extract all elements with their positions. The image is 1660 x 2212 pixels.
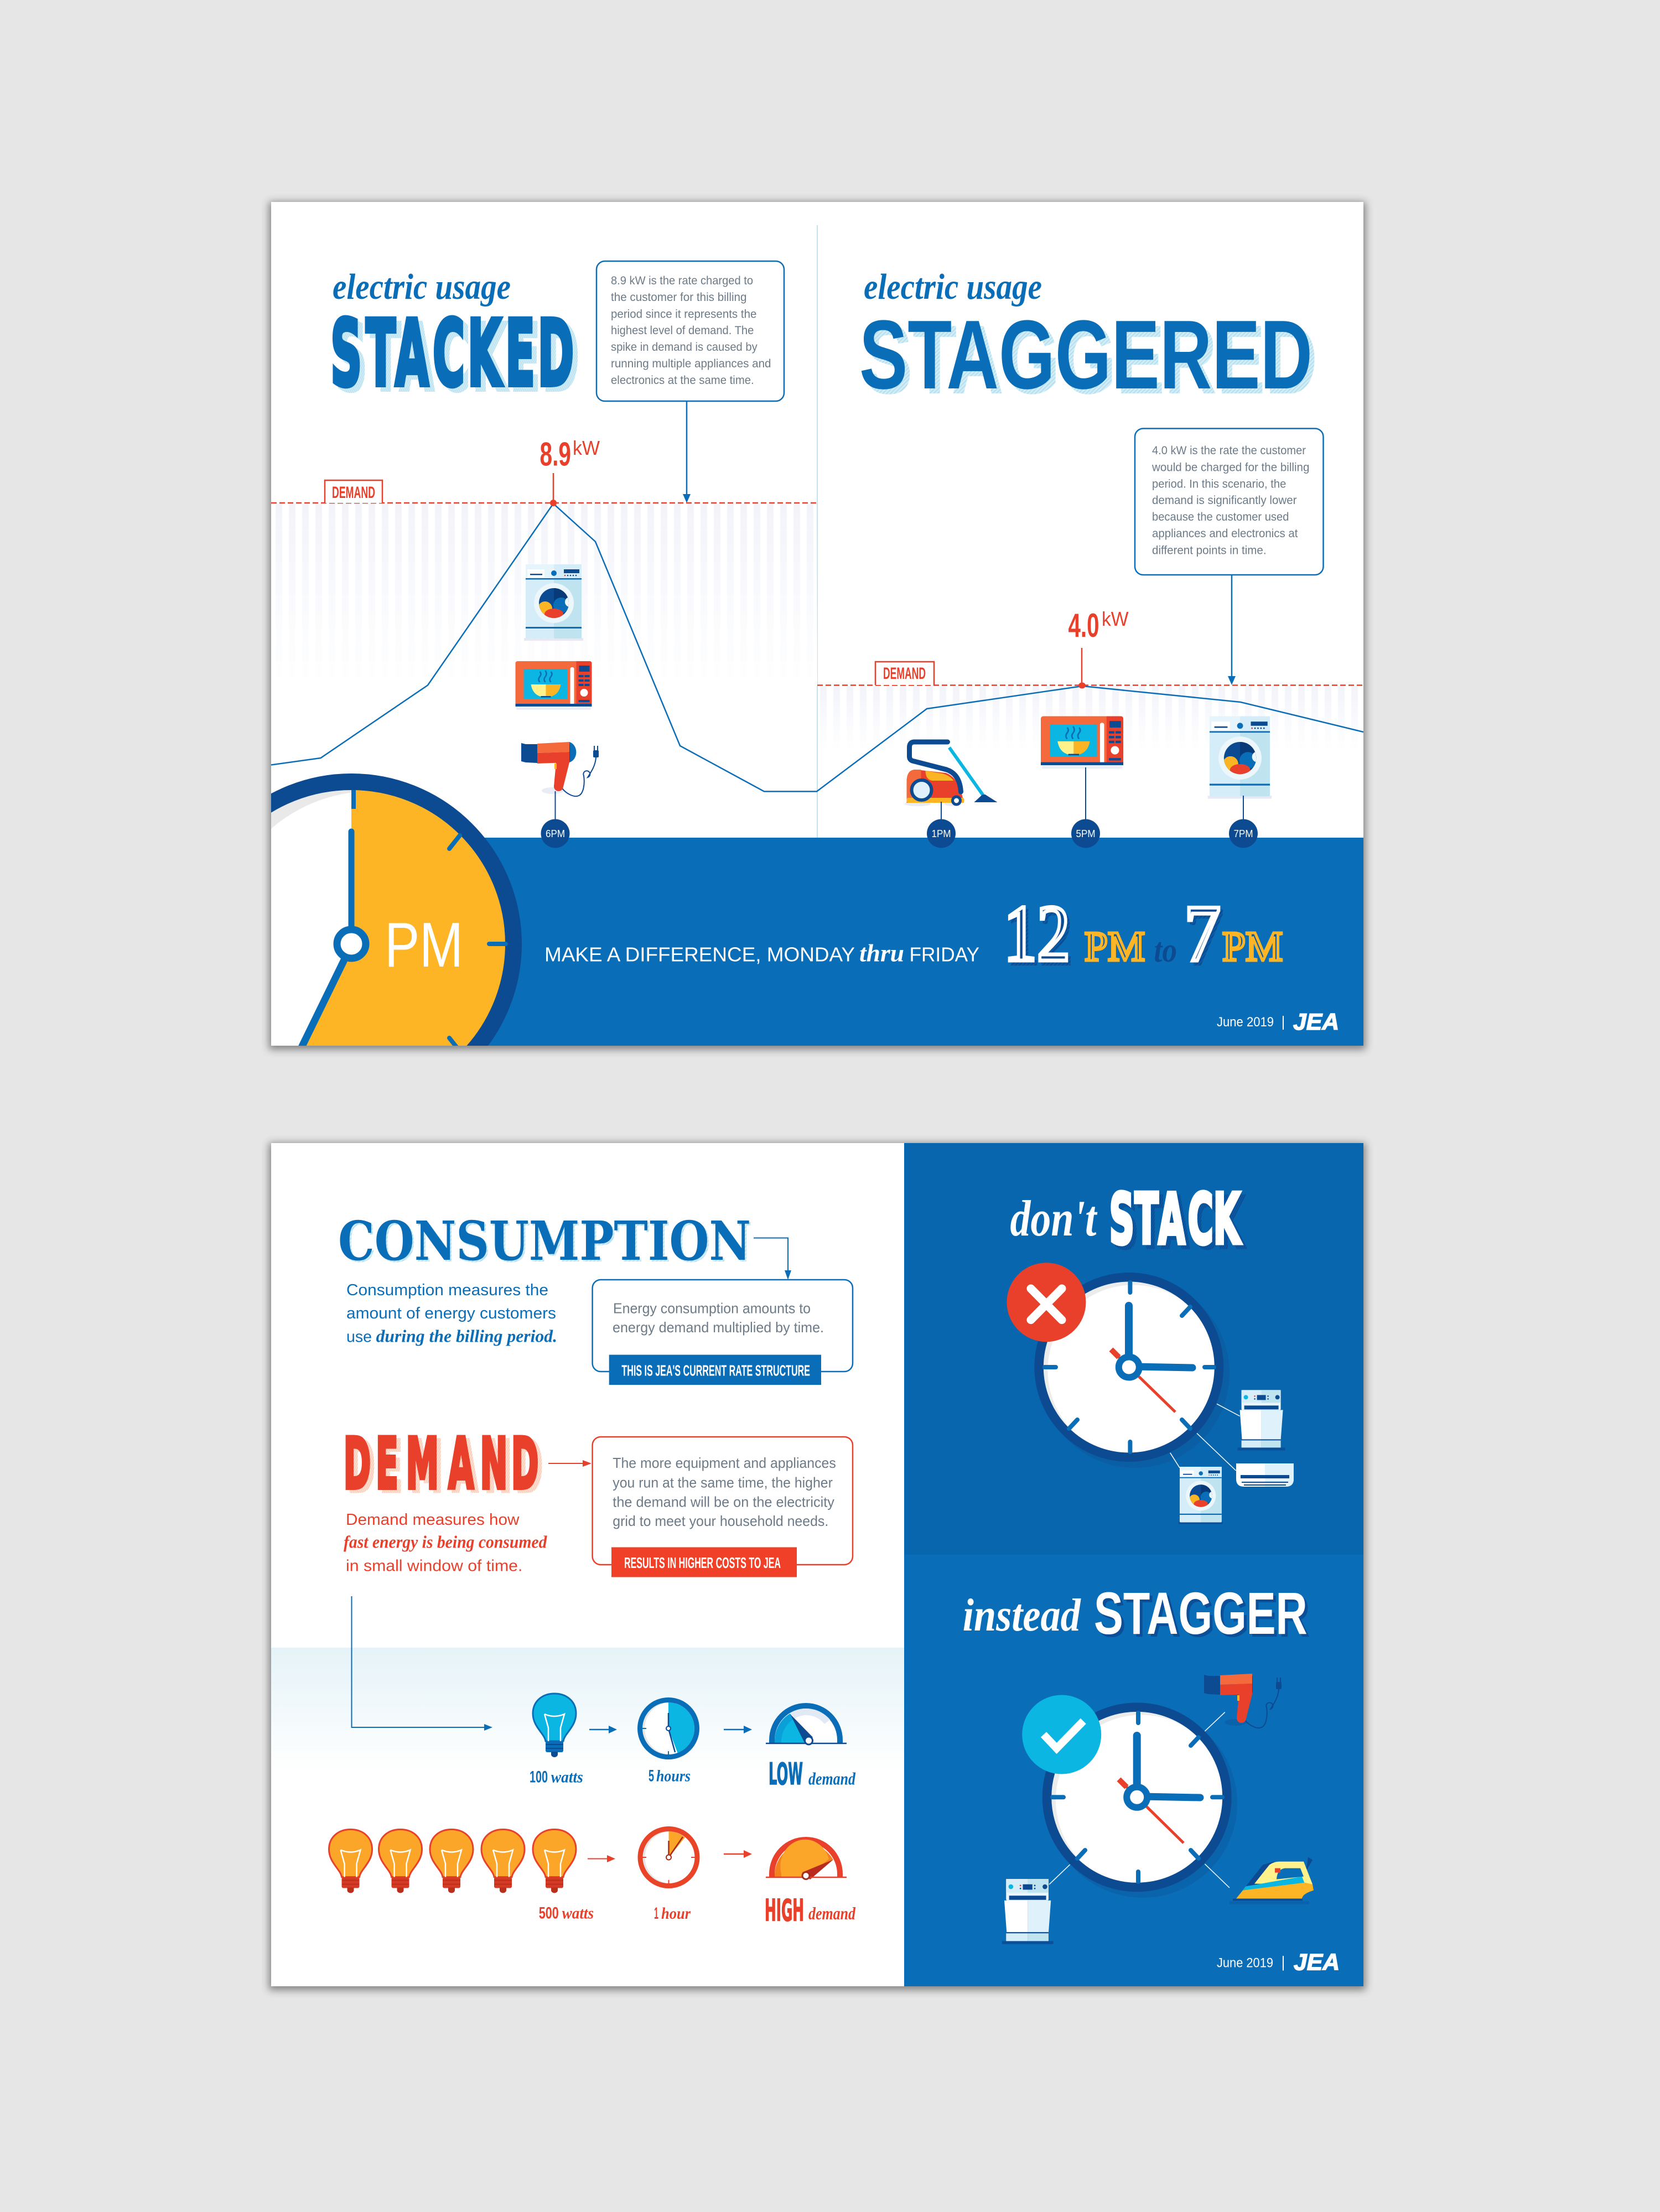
icon: row of five orange bulbs [329,1829,576,1893]
icon: 1 hour clock [640,1829,697,1886]
time window: 12 PM to 7 PM: 12 [1007,892,1073,982]
time window: 12 PM to 7 PM: to [1154,932,1177,969]
demand line stacked: DEMAND [332,484,375,502]
callout: demand: the demand will be on the electricity [613,1494,834,1510]
icon: clock with stacked appliances [1039,1277,1230,1468]
label: high demand: demand [808,1903,856,1923]
callout: 8.9 kW explanation: spike in demand is caused by [611,341,758,354]
arrow: bulb to clock low [589,1726,617,1733]
value: 8.9 kW: 8.9 [540,436,571,472]
label: 5 hours: 5 [649,1767,654,1785]
footer: June 2019 JEA [1217,1949,1340,1975]
clock label: PM [385,910,463,980]
callout: 8.9 kW explanation [596,261,784,401]
time window: 12 PM to 7 PM [1004,889,1283,982]
bottom band [271,838,1363,1046]
banner: higher costs [611,1547,797,1577]
banner: current rate structure [609,1355,821,1385]
icon: washer stacked [524,564,583,641]
heading: electric usage staggered: electric usage [864,267,1042,307]
time window: 12 PM to 7 PM: PM [1085,923,1145,970]
heading: don't stack: don't [1010,1190,1097,1247]
leader lines to appliances [1170,1404,1240,1471]
panel: don't stack [904,1143,1363,1555]
banner: current rate structure: THIS IS JEA'S CURRENT RATE STRUCTURE [621,1362,810,1379]
heading: consumption: CONSUMPTION [338,1209,751,1273]
label: 1 hour: hour [661,1904,691,1923]
footer: June 2019 JEA: JEA [1293,1009,1339,1035]
heading: electric usage staggered [859,267,1317,414]
value: 4.0 kW: 4.0 [1068,607,1099,644]
demand line staggered [817,648,1363,688]
footer: June 2019 JEA: June 2019 [1217,1015,1274,1030]
icon: high demand gauge [766,1837,847,1879]
value: 4.0 kW: kW [1102,607,1129,630]
icon: air conditioner [1236,1463,1294,1487]
callout: demand [593,1437,853,1577]
heading: instead stagger: STAGGER [1097,1582,1310,1649]
time window: 12 PM to 7 PM: 7 [1184,889,1221,978]
footer: June 2019 JEA: JEA [1294,1949,1340,1975]
tagline: make a difference: FRIDAY [910,943,979,966]
panel: instead stagger [904,1555,1363,1986]
tagline: make a difference: MAKE A DIFFERENCE, MONDAY [544,943,855,966]
line chart: stacked and staggered demand [271,505,1363,791]
text: demand definition: Demand measures how [346,1511,520,1529]
marker: 1PM [927,802,956,848]
heading: consumption: CONSUMPTION [340,1211,753,1274]
heading: electric usage stacked: STACKED [330,300,574,407]
callout: 4.0 kW explanation: appliances and electronics at [1152,527,1298,540]
callout: demand: grid to meet your household needs. [613,1513,828,1529]
callout: 4.0 kW explanation: would be charged for the billing [1151,461,1309,474]
label: low demand: demand [808,1769,856,1789]
icon: washer staggered [1208,716,1272,799]
heading: instead stagger [963,1580,1310,1649]
text: consumption definition: Consumption measures the [346,1281,548,1299]
icon: microwave stacked [516,661,592,710]
icon: blue bulb [533,1694,576,1757]
icon: clock with staggered appliances [1047,1707,1237,1898]
icon: low demand gauge [766,1703,847,1744]
heading: instead stagger: instead [963,1590,1082,1641]
label: low demand: LOW [769,1757,803,1792]
callout: 8.9 kW explanation: period since it represents the [611,308,756,321]
callout: 4.0 kW explanation: demand is significantly lower [1152,494,1297,507]
icon: dishwasher [1002,1879,1054,1944]
callout: demand: The more equipment and appliances [613,1455,836,1471]
callout: 8.9 kW explanation: the customer for this billing [611,291,747,304]
heading: electric usage stacked: electric usage [333,267,511,307]
callout: 4.0 kW explanation: 4.0 kW is the rate the customer [1152,444,1306,457]
arrow: bulbs to clock high [588,1855,615,1862]
label: high demand: HIGH [765,1893,804,1928]
arrow: demand text to example [352,1596,492,1731]
text: consumption definition [346,1281,557,1346]
callout: consumption: Energy consumption amounts to [613,1300,811,1316]
heading: demand: DEMAND [344,1424,538,1505]
callout: 4.0 kW explanation: different points in time. [1152,544,1267,557]
footer: June 2019 JEA [1217,1009,1339,1035]
panel: front page stacked vs staggered [263,197,1371,1055]
callout: 8.9 kW explanation: highest level of demand. The [611,324,754,337]
panel: back page consumption vs demand [269,1143,1366,1990]
arrow: callout to stacked demand line [683,401,691,503]
text: consumption definition: during the billing period. [376,1326,557,1346]
arrow: clock to gauge high [724,1850,752,1858]
heading: don't stack: STACK [1109,1180,1242,1260]
icon: iron [1230,1857,1314,1904]
arrow: clock to gauge low [724,1726,752,1733]
heading: electric usage stacked: STACKED [335,305,579,412]
heading: demand: DEMAND [347,1427,543,1508]
icon: 5 hour clock [640,1700,697,1757]
icon: dishwasher [1238,1390,1285,1450]
text: consumption definition: use [346,1328,372,1346]
callout: demand: you run at the same time, the higher [613,1474,833,1491]
icon: hair dryer [1204,1674,1282,1728]
icon: check badge [1022,1695,1101,1774]
time window: 12 PM to 7 PM: 7 [1187,892,1223,982]
marker: 7PM: 7PM [1234,828,1253,839]
icon: hair dryer stacked [521,742,599,796]
label: 500 watts [539,1904,594,1922]
arrow: callout to staggered demand line [1228,575,1236,685]
callout: 8.9 kW explanation: electronics at the same time. [611,374,754,387]
text: demand definition: fast energy is being consumed [344,1532,547,1552]
callout: consumption [593,1280,853,1385]
callout: 4.0 kW explanation: because the customer used [1152,511,1289,523]
value: 8.9 kW: kW [573,437,600,459]
callout: 4.0 kW explanation [1135,428,1324,575]
label: 1 hour: 1 [654,1904,658,1923]
marker: 7PM [1229,796,1258,848]
callout: 8.9 kW explanation: running multiple appliances and [611,357,771,370]
heading: instead stagger: STAGGER [1094,1580,1308,1647]
time window: 12 PM to 7 PM: 12 [1004,889,1070,978]
icon: washer [1179,1467,1223,1524]
icon: red x badge [1007,1263,1086,1342]
icon: large PM clock [271,773,522,1046]
marker: 5PM [1071,767,1100,848]
callout: 8.9 kW explanation: 8.9 kW is the rate charged to [611,274,753,287]
icon: microwave staggered [1041,716,1123,769]
text: demand definition: in small window of time. [346,1557,522,1575]
label: 100 watts: 100 [530,1768,548,1787]
heading: electric usage staggered: STAGGERED [864,305,1317,414]
footer: June 2019 JEA: June 2019 [1217,1956,1273,1971]
heading: don't stack [1010,1180,1246,1264]
label: 5 hours: hours [656,1767,691,1785]
label: 100 watts: watts [551,1768,583,1787]
time window: 12 PM to 7 PM: PM [1222,923,1283,970]
text: demand definition [344,1511,547,1575]
marker: 1PM: 1PM [932,828,951,839]
label: 100 watts [530,1768,583,1787]
demand line stacked [271,473,817,506]
icon: vacuum cleaner [904,742,997,806]
banner: higher costs: RESULTS IN HIGHER COSTS TO JEA [624,1554,781,1571]
arrow: consumption to callout [754,1238,791,1280]
marker: 6PM: 6PM [546,828,565,839]
heading: don't stack: STACK [1113,1183,1246,1264]
heading: electric usage staggered: STAGGERED [859,300,1313,409]
callout: consumption: energy demand multiplied by time. [613,1319,824,1336]
arrow: demand to callout [548,1460,592,1467]
callout: 4.0 kW explanation: period. In this scenario, the [1152,478,1286,490]
text: consumption definition: amount of energy customers [346,1305,556,1322]
label: 500 watts: 500 [539,1904,559,1922]
label: 500 watts: watts [562,1904,594,1922]
demand line staggered: DEMAND [883,664,926,683]
marker: 5PM: 5PM [1076,828,1096,839]
marker: 6PM [541,791,570,848]
tagline: make a difference [544,939,979,967]
tagline: make a difference: thru [859,939,904,967]
leader lines to appliances [1049,1712,1230,1888]
